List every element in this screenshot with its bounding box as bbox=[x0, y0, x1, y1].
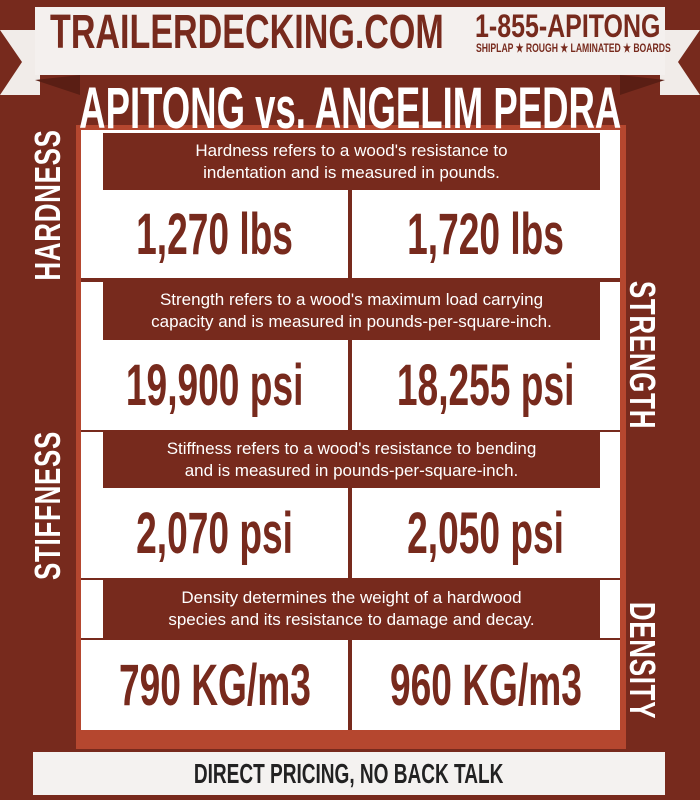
value angelim: 18,255 psi bbox=[397, 352, 575, 418]
value angelim bbox=[352, 340, 620, 430]
value apitong: 1,270 lbs bbox=[136, 202, 293, 266]
section: density bbox=[81, 580, 620, 730]
phone: 1-855-APITONG bbox=[475, 8, 660, 44]
caption: and is measured in pounds-per-square-inch. bbox=[185, 461, 518, 480]
value apitong: 19,900 psi bbox=[126, 352, 303, 418]
value angelim: 960 KG/m3 bbox=[390, 652, 582, 718]
caption bbox=[103, 432, 600, 488]
label strength: STRENGTH bbox=[622, 281, 663, 429]
footer banner: DIRECT PRICING, NO BACK TALK bbox=[194, 758, 504, 788]
value angelim bbox=[352, 640, 620, 730]
footer banner bbox=[33, 752, 665, 795]
caption: species and its resistance to damage and decay. bbox=[168, 610, 535, 629]
label hardness: HARDNESS bbox=[27, 129, 68, 281]
section: strength bbox=[81, 282, 620, 430]
frame bbox=[76, 125, 626, 749]
header banner bbox=[0, 6, 700, 95]
value angelim: 2,050 psi bbox=[408, 500, 564, 566]
caption: Density determines the weight of a hardwood bbox=[181, 588, 522, 607]
section: hardness bbox=[81, 130, 620, 278]
caption bbox=[103, 580, 600, 638]
caption: Hardness refers to a wood's resistance to bbox=[195, 140, 508, 160]
value apitong bbox=[81, 340, 348, 430]
caption bbox=[103, 282, 600, 340]
value apitong: 2,070 psi bbox=[136, 500, 293, 566]
site name: TRAILERDECKING.COM bbox=[50, 6, 444, 59]
value apitong: 790 KG/m3 bbox=[119, 652, 310, 718]
value apitong bbox=[81, 190, 348, 278]
caption bbox=[103, 133, 600, 190]
caption: Strength refers to a wood's maximum load carrying bbox=[160, 290, 543, 309]
section: stiffness bbox=[81, 432, 620, 578]
label density: DENSITY bbox=[622, 602, 663, 720]
value angelim bbox=[352, 190, 620, 278]
caption: capacity and is measured in pounds-per-square-inch. bbox=[151, 312, 552, 331]
value angelim bbox=[352, 488, 620, 578]
caption: indentation and is measured in pounds. bbox=[203, 162, 500, 182]
value apitong bbox=[81, 640, 348, 730]
title: APITONG vs. ANGELIM PEDRA bbox=[79, 76, 621, 140]
label stiffness: STIFFNESS bbox=[27, 430, 68, 580]
white panel bbox=[81, 130, 620, 730]
caption: Stiffness refers to a wood's resistance to bending bbox=[167, 439, 536, 458]
value apitong bbox=[81, 488, 348, 578]
value angelim: 1,720 lbs bbox=[408, 202, 564, 266]
product line: SHIPLAP ★ ROUGH ★ LAMINATED ★ BOARDS bbox=[476, 41, 671, 55]
